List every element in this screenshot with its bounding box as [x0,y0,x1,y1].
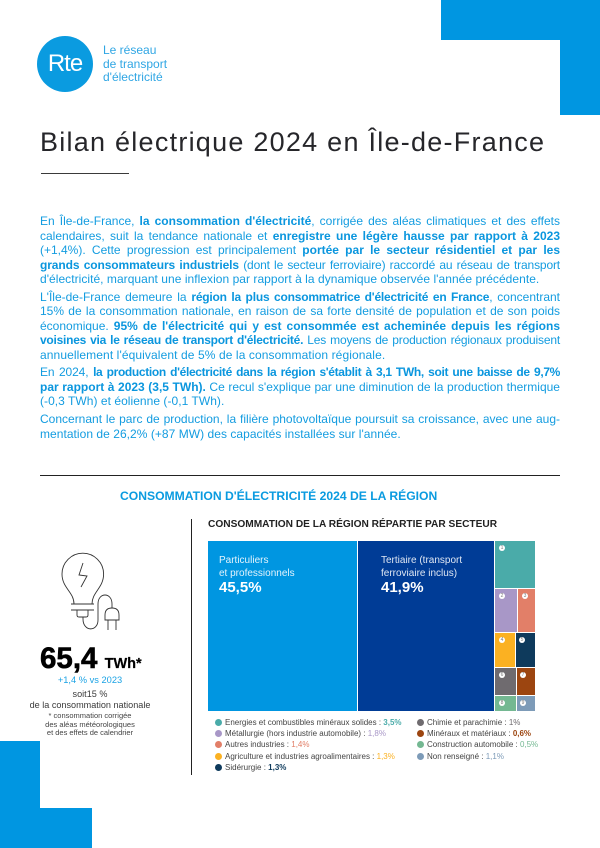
change vs 2023: +1,4 % vs 2023 [58,675,122,685]
paragraph: region: économique. 95% de l'électricité qui y est consommée est acheminée depuis les régions [40,319,560,333]
paragraph: region: voisines via le réseau de transport d'électricité. Les moyens de production régionaux produisent [40,333,560,347]
share of national consumption: soit15 % [73,689,107,699]
paragraph: region [40,290,560,362]
legend item: Chimie et parachimie : 1% [427,718,520,727]
cell: particuliers [208,541,357,711]
cell: tertiaire: Tertiaire (transport [381,555,462,566]
cell: particuliers: Particuliers [219,555,268,566]
cell: agriculture [495,633,515,667]
legend item: Sidérurgie : 1,3% [225,763,286,772]
cell: particuliers: 45,5% [219,579,262,596]
footnote [45,711,135,737]
legend item: Métallurgie (hors industrie automobile) : 1,8% [225,729,386,738]
footnote: et des effets de calendrier [47,728,133,737]
logo tagline: de transport [103,56,167,70]
footnote: des aléas météorologiques [45,720,135,729]
panel: total consumption [30,552,150,737]
chart heading: CONSOMMATION DE LA RÉGION RÉPARTIE PAR SECTEUR [208,519,497,530]
legend item: Construction automobile : 0,5% [427,740,538,749]
cell: metallurgie: 2 [501,593,503,599]
cell: siderurgie [516,633,535,667]
paragraph: capacity: Concernant le parc de production, la filière photovoltaïque poursuit sa croissance, avec une aug- [40,412,560,426]
legend item: Non renseigné : 1,1% [427,752,504,761]
cell: chimie: 6 [501,672,503,678]
title: Bilan électrique 2024 en Île-de-France [40,127,545,157]
paragraph: consumption: d'électricité, marquant une inflexion par rapport à la dynamique observée l'année précédente. [40,272,539,286]
cell: tertiaire: ferroviaire inclus) [381,568,457,579]
cell: energies: 1 [501,545,503,551]
treemap chart [208,541,535,711]
legend [215,718,538,772]
paragraph: production: par rapport à 2023 (3,5 TWh). Ce recul s'explique par une diminution de la production thermique [40,380,560,394]
cell: autres industries [518,589,535,632]
section heading: CONSOMMATION D'ÉLECTRICITÉ 2024 DE LA RÉGION [120,489,437,503]
footnote: * consommation corrigée [49,711,131,720]
paragraph: production: (-0,3 TWh) et éolienne (-0,1 TWh). [40,394,224,408]
paragraph: consumption [40,214,560,286]
legend item: Minéraux et matériaux : 0,6% [427,729,531,738]
cell: chimie [495,668,516,695]
paragraph: consumption: En Île-de-France, la consommation d'électricité, corrigée des aléas climatiques et des effets [40,214,560,228]
cell: metallurgie [495,589,517,632]
logo tagline [103,43,167,84]
paragraph: region: annuellement l'équivalent de 5% de la consommation régionale. [40,348,385,362]
icon: light bulb with plug [62,552,120,630]
cell: construction automobile [495,696,516,711]
decorative corner: top right [441,0,600,115]
paragraph: consumption: (+1,4%). Cette progression est principalement portée par le secteur résidentiel et par les [40,243,560,257]
cell: autres industries: 3 [524,593,526,599]
cell: siderurgie: 5 [521,637,523,643]
legend item: Autres industries : 1,4% [225,740,309,749]
paragraph: region: L'Île-de-France demeure la région la plus consommatrice d'électricité en France, concentrant [40,290,560,304]
logo: Rte [37,36,167,92]
cell: particuliers: et professionnels [219,568,295,579]
title underline [41,173,129,174]
paragraph: region: 15% de la consommation nationale, en raison de sa forte densité de population et de son poids [40,304,560,318]
cell: tertiaire: 41,9% [381,579,424,596]
logo tagline: Le réseau [103,43,156,57]
logo tagline: d'électricité [103,70,163,84]
cell: mineraux: 7 [522,672,524,678]
paragraph: consumption: calendaires, suit la tendance nationale et enregistre une légère hausse par rapport à 2023 [40,228,560,242]
paragraph: consumption: grands consommateurs industriels (dont le secteur ferroviaire) raccordé au réseau de transport [40,258,560,272]
legend item: Energies et combustibles minéraux solides : 3,5% [225,718,402,727]
paragraph: production [40,365,560,408]
cell: mineraux [517,668,535,695]
big number: 65,4 TWh* [40,642,142,675]
paragraph: capacity: mentation de 26,2% (+87 MW) des capacités installées sur l'année. [40,426,401,440]
logo badge [37,36,93,92]
legend item: Agriculture et industries agroalimentaires : 1,3% [225,752,395,761]
logo badge: Rte [48,50,82,77]
paragraph: production: En 2024, la production d'électricité dans la région s'établit à 3,1 TWh, soit une baisse de 9,7% [40,365,560,379]
cell: tertiaire [358,541,494,711]
intro text [40,214,560,440]
paragraph: capacity [40,412,560,440]
share of national consumption: de la consommation nationale [30,700,150,710]
cell: energies [495,541,535,588]
cell: non renseigne: 9 [522,700,524,706]
share of national consumption [30,689,150,710]
decorative corner: bottom left [0,741,92,848]
vertical divider [191,519,192,775]
cell: non renseigne [517,696,535,711]
cell: agriculture: 4 [501,637,503,643]
section divider [40,475,560,476]
cell: construction automobile: 8 [501,700,503,706]
